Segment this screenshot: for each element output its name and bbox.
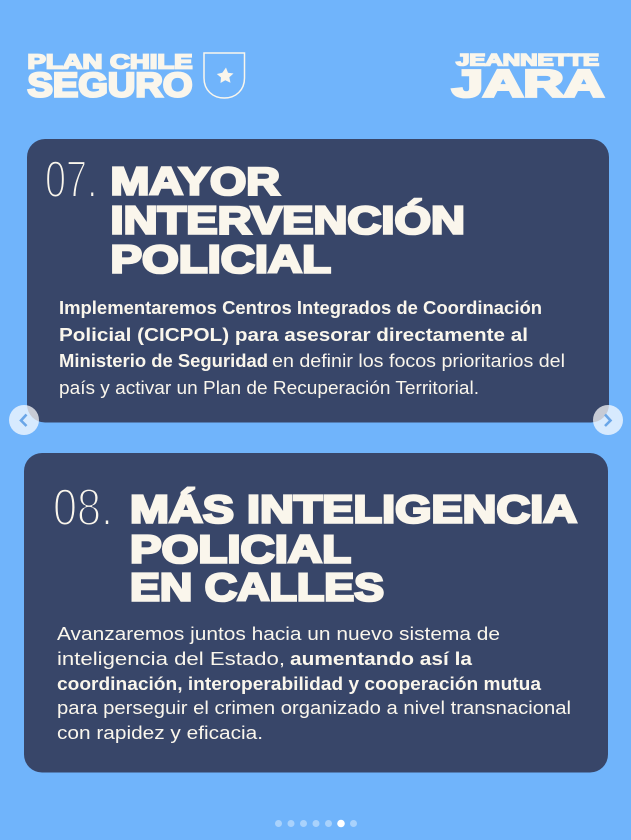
arrow: next — [593, 405, 623, 435]
panel: 08 mas inteligencia policial — [24, 453, 608, 772]
text block 08: Avanzaremos juntos hacia un nuevo sistema de — [57, 624, 500, 644]
logo: Plan Chile Seguro: PLAN CHILE — [28, 52, 192, 74]
logo: Plan Chile Seguro — [28, 52, 244, 104]
text block 08 — [57, 624, 571, 743]
text block 08: inteligencia del Estado, — [57, 649, 285, 669]
heading 08: EN CALLES — [130, 566, 384, 610]
heading 07 — [110, 160, 465, 282]
icon: shield with star — [204, 53, 244, 98]
text block 07: Ministerio de Seguridad — [59, 351, 268, 371]
logo: Plan Chile Seguro: SEGURO — [28, 66, 192, 104]
logo: Jeannette Jara: JARA — [452, 64, 604, 106]
pagination dots — [275, 820, 357, 827]
heading 07: MAYOR — [110, 160, 280, 204]
panel: 07 mayor intervencion policial — [27, 139, 609, 422]
text block 08: aumentando así la — [290, 649, 473, 669]
number 08: 08. — [53, 479, 113, 537]
arrow: previous — [9, 405, 39, 435]
number 07: 07. — [45, 151, 98, 209]
text block 07: Implementaremos Centros Integrados de Coordinación — [59, 298, 542, 318]
heading 07: POLICIAL — [110, 238, 331, 282]
logo: Jeannette Jara — [452, 50, 604, 106]
text block 07: Policial (CICPOL) para asesorar directamente al — [59, 325, 528, 345]
text block 08: con rapidez y eficacia. — [57, 723, 263, 743]
text block 08: para perseguir el crimen organizado a nivel transnacional — [57, 698, 571, 718]
heading 08: POLICIAL — [130, 528, 351, 572]
heading 08 — [130, 488, 577, 610]
heading 08: MÁS INTELIGENCIA — [130, 488, 577, 532]
heading 07: INTERVENCIÓN — [110, 198, 465, 242]
text block 07: país y activar un Plan de Recuperación Territorial. — [59, 378, 479, 398]
text block 08: coordinación, interoperabilidad y cooperación mutua — [57, 674, 542, 694]
text block 07: en definir los focos prioritarios del — [272, 351, 565, 371]
logo: Jeannette Jara: JEANNETTE — [456, 50, 599, 70]
text block 07 — [59, 298, 565, 398]
